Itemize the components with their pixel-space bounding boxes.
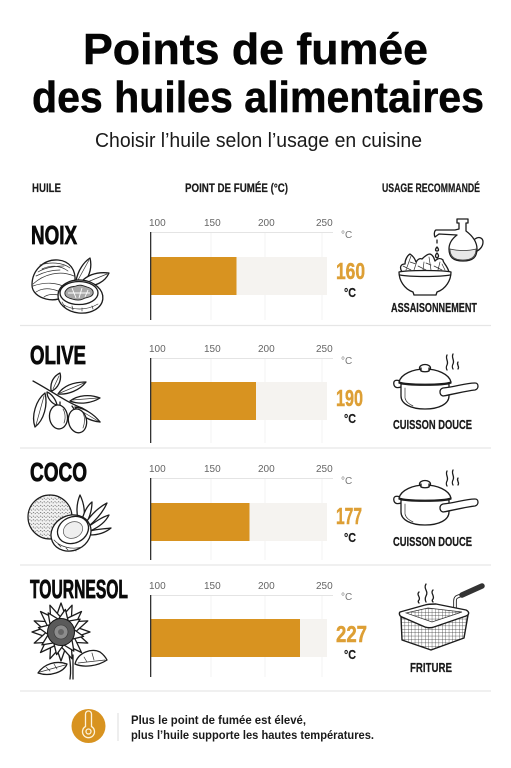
- usage label: cuisson douce: CUISSON DOUCE: [393, 535, 472, 549]
- subtitle: Choisir l’huile selon l’usage en cuisine: [95, 130, 422, 152]
- callout: note: [72, 709, 374, 743]
- chart: coco 177: 250: [316, 464, 333, 475]
- column headers: [32, 180, 480, 195]
- oil name: coco: COCO: [30, 457, 87, 487]
- chart: olive 190: 250: [316, 344, 333, 355]
- chart: tournesol 227: [149, 581, 367, 677]
- chart: tournesol 227: 200: [258, 581, 275, 592]
- usage label: cuisson douce: CUISSON DOUCE: [393, 418, 472, 432]
- column headers: POINT DE FUMÉE (°C): [185, 180, 288, 195]
- icon: fryer basket: [399, 584, 482, 650]
- chart: noix 160: 250: [316, 218, 333, 229]
- chart: olive 190: °C: [344, 411, 356, 426]
- panel: coco: [28, 457, 478, 560]
- chart: olive 190: 200: [258, 344, 275, 355]
- icon: saucepan: [394, 354, 478, 409]
- icon: olive branch: [33, 373, 100, 435]
- chart: coco 177: 100: [149, 464, 166, 475]
- icon: walnut: [32, 258, 109, 315]
- chart: coco 177: 200: [258, 464, 275, 475]
- column headers: HUILE: [32, 181, 61, 195]
- icon: sunflower: [20, 591, 107, 679]
- chart: olive 190: 190: [336, 385, 363, 411]
- chart: tournesol 227: 250: [316, 581, 333, 592]
- chart: noix 160: 150: [204, 218, 221, 229]
- oil name: tournesol: TOURNESOL: [30, 574, 128, 604]
- panel: noix: [31, 218, 483, 320]
- chart: coco 177: 177: [336, 503, 362, 529]
- usage label: assaisonnement: ASSAISONNEMENT: [391, 301, 477, 315]
- note text: Plus le point de fumée est élevé,: [131, 713, 306, 727]
- title: des huiles alimentaires: [32, 73, 484, 122]
- chart: noix 160: 160: [336, 258, 365, 284]
- chart: olive 190: °C: [341, 356, 352, 367]
- chart: coco 177: °C: [344, 530, 356, 545]
- chart: tournesol 227: 150: [204, 581, 221, 592]
- chart: olive 190: 100: [149, 344, 166, 355]
- chart: noix 160: 200: [258, 218, 275, 229]
- panel: tournesol: [20, 574, 482, 679]
- chart: noix 160: °C: [344, 285, 356, 300]
- chart: noix 160: °C: [341, 230, 352, 241]
- chart: olive 190: 150: [204, 344, 221, 355]
- usage label: friture: FRITURE: [410, 661, 452, 675]
- chart: tournesol 227: °C: [341, 592, 352, 603]
- note text: plus l’huile supporte les hautes températures.: [131, 728, 374, 742]
- note text: [131, 713, 374, 742]
- chart: noix 160: 100: [149, 218, 166, 229]
- chart: coco 177: °C: [341, 476, 352, 487]
- icon: thermometer: [72, 709, 106, 743]
- icon: coconut: [28, 495, 111, 558]
- chart: olive 190: [149, 344, 363, 443]
- icon: saucepan: [394, 470, 478, 525]
- oil name: olive: OLIVE: [30, 340, 86, 370]
- chart: coco 177: [149, 464, 362, 560]
- icon: oil jug and salad bowl: [399, 219, 483, 295]
- chart: tournesol 227: °C: [344, 647, 356, 662]
- chart: coco 177: 150: [204, 464, 221, 475]
- chart: noix 160: [149, 218, 365, 320]
- chart: tournesol 227: 227: [336, 621, 367, 647]
- panel: olive: [30, 340, 478, 443]
- oil name: noix: NOIX: [31, 220, 77, 250]
- title: [32, 25, 484, 122]
- title: Points de fumée: [83, 25, 428, 74]
- chart: tournesol 227: 100: [149, 581, 166, 592]
